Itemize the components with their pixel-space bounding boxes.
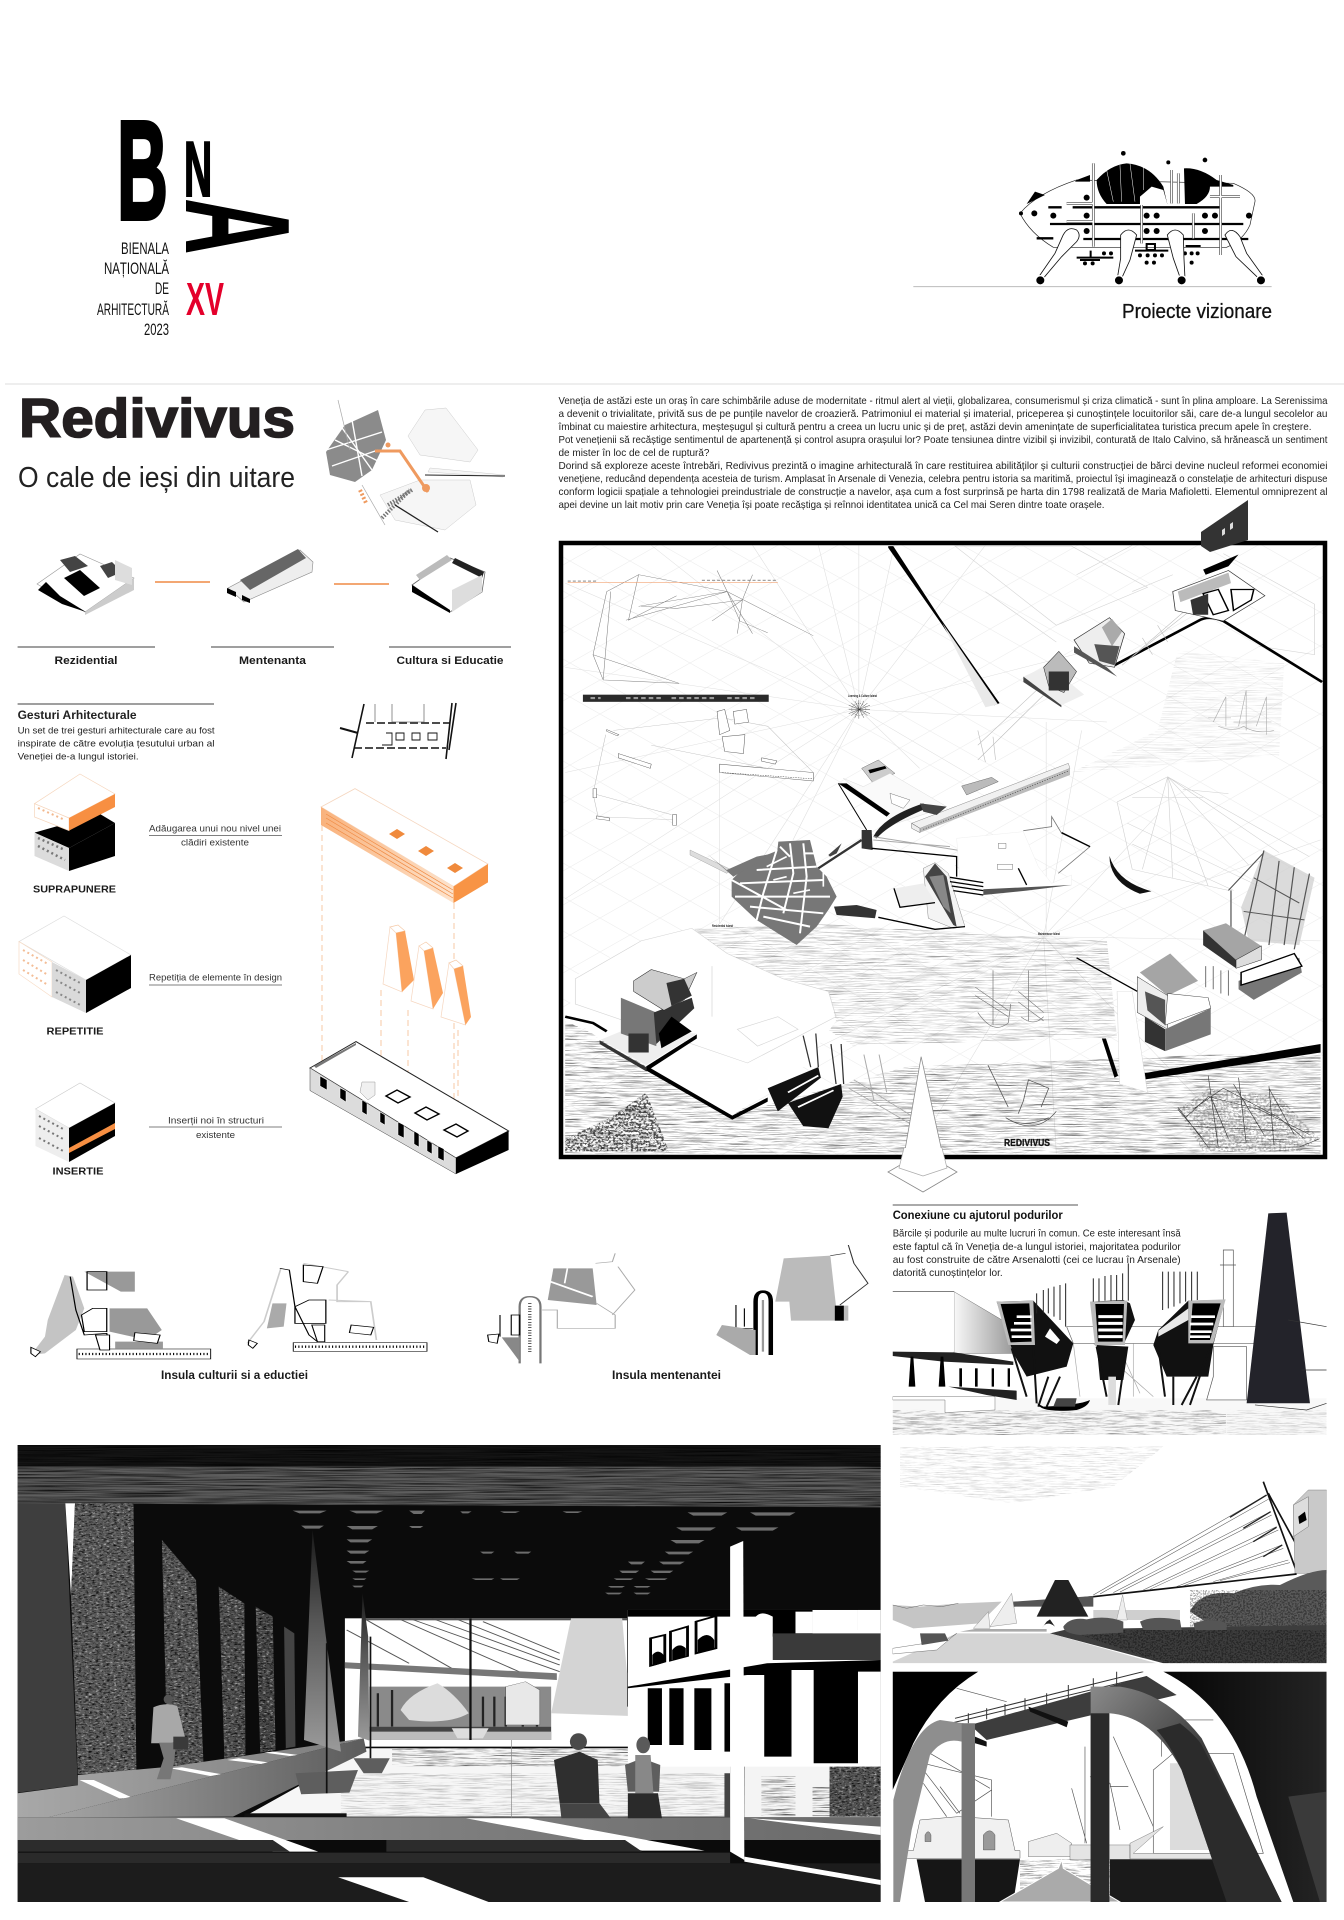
foreground sun bars <box>338 1857 881 1902</box>
black water edges <box>1077 958 1137 991</box>
lower-left plans diagram <box>593 709 813 825</box>
exploded axonometric <box>310 789 509 1174</box>
bridge head <box>920 803 947 815</box>
Neptune sketch <box>988 1065 1056 1126</box>
terrace black edge <box>838 783 890 817</box>
east island <box>957 832 1072 890</box>
white column ghost <box>1117 991 1147 1092</box>
walking man <box>151 1695 188 1779</box>
light islands <box>380 408 505 530</box>
isometric grid <box>563 545 1323 1155</box>
label: Insula culturii: Insula culturii si a eductiei <box>161 1370 308 1382</box>
map line <box>425 475 505 476</box>
far sails <box>1117 1595 1127 1620</box>
right section blocks <box>1203 923 1302 1000</box>
plan 4 <box>716 1245 868 1355</box>
pier trusses <box>978 608 1193 762</box>
light building ghosts <box>575 545 1315 1063</box>
black wharf <box>646 1067 768 1120</box>
shore outline <box>893 1603 958 1608</box>
glass mullion <box>510 1740 512 1850</box>
gate chain <box>834 905 877 918</box>
programme axonometries <box>37 549 485 615</box>
robot dots <box>1019 151 1252 265</box>
base building <box>310 1042 509 1174</box>
boat bow <box>1000 1860 1120 1902</box>
caption: suprapunere <box>149 824 282 848</box>
orange node <box>386 442 390 448</box>
intro text: a devenit o trivialitate, privită sus de pe punțile navelor de croazieră. Patrimoniul ei material și imaterial, priceperea și cunoștințele locuitorilor săi, care de-a lungul secolelor au <box>558 408 1328 420</box>
docked ship <box>1070 1827 1213 1860</box>
main axonometric drawing <box>561 500 1325 1192</box>
ceiling skylights <box>293 1511 795 1594</box>
mast <box>1263 1482 1308 1572</box>
east island outline <box>1023 817 1090 873</box>
canal foreground <box>18 1863 881 1902</box>
left hall wall <box>893 1292 1013 1365</box>
robot body <box>1020 180 1255 247</box>
sails <box>304 1530 631 1752</box>
plan 3 <box>488 1253 635 1363</box>
shore left <box>893 1602 1002 1628</box>
programme labels: Mentenanta <box>239 655 307 667</box>
black swoosh <box>1203 555 1239 575</box>
gesture: suprapunere icon <box>34 774 115 871</box>
ground line <box>913 285 1272 288</box>
black short edge <box>1102 1039 1118 1078</box>
bridges text block <box>893 1205 1181 1279</box>
drawing contents <box>565 545 1322 1153</box>
floor plan fragment <box>340 703 456 759</box>
intro text: de mister în loc de cel de ruptură? <box>558 447 710 459</box>
timber sail structure <box>1228 850 1315 949</box>
main interior render <box>18 1445 881 1902</box>
background chimney and city <box>1207 1250 1247 1400</box>
dome ribs <box>1107 163 1143 202</box>
site map <box>326 400 505 532</box>
connecting orange lines <box>155 582 389 584</box>
black quay line <box>1115 618 1322 682</box>
centre boathouse <box>1028 1833 1072 1857</box>
plinth <box>18 1840 642 1852</box>
hub tower <box>862 830 873 850</box>
caption: suprapunere: clădiri existente <box>181 838 249 848</box>
gesture: repetitie icon <box>19 916 131 1013</box>
eastward line <box>872 848 957 877</box>
base doors <box>925 1831 995 1850</box>
timeline strip <box>583 695 769 702</box>
orange connection <box>375 451 428 492</box>
ships lower right <box>1178 1076 1320 1147</box>
robot pipe highlights <box>1067 163 1240 255</box>
label: suprapunere: SUPRAPUNERE <box>33 884 116 896</box>
ship sketches upper <box>1208 690 1274 735</box>
right tower <box>1293 1490 1327 1573</box>
moored dark boat <box>948 1387 1017 1400</box>
south quay <box>878 917 965 929</box>
shadow on right tower <box>1170 1763 1253 1850</box>
dark pylon <box>1037 1580 1088 1617</box>
left cut building <box>600 970 697 1071</box>
lawn <box>1050 1625 1327 1663</box>
lagoon water <box>565 650 1321 1153</box>
chimneys <box>383 925 471 1025</box>
dock edge <box>894 888 935 907</box>
right wing <box>628 1610 881 1767</box>
gesture: insertie icon <box>36 1083 115 1162</box>
brick columns <box>18 1503 295 1793</box>
deck band <box>1067 1327 1268 1343</box>
walkway sun bars <box>80 1752 298 1798</box>
roof slab <box>321 789 488 903</box>
pod 3 <box>1153 1272 1226 1405</box>
obelisk base over frame <box>888 1148 957 1192</box>
courtyard <box>890 793 910 808</box>
timber beam <box>18 1467 881 1507</box>
drawing paper <box>563 545 1323 1155</box>
robot feet <box>1036 276 1266 285</box>
white column <box>730 1541 744 1860</box>
Gesturi Arhitecturale text block: Un set de trei gesturi arhitecturale care au fost <box>18 726 215 736</box>
dome details <box>1140 187 1167 204</box>
trees <box>1190 1570 1327 1627</box>
caption: insertie <box>149 1116 282 1141</box>
tiny island labels: Learning & Culture Island <box>848 694 877 698</box>
cable-stayed bridge render <box>893 1447 1327 1663</box>
floor sun bars <box>176 1818 881 1852</box>
Gesturi Arhitecturale text block: inspirate de către evoluția țesutului urban al <box>18 738 215 750</box>
terrace and buildings <box>843 773 947 823</box>
left piers <box>909 1357 1010 1387</box>
connecting black lines <box>818 840 862 868</box>
intro text: îmbinat cu maiestire arhitectura, meșteșugul și cultură pentru a creea un lucru unic și de preț, astăzi devin amenințate de superficialitatea turistica precum apele în creștere. <box>558 421 1312 433</box>
bridges text block: Bărcile și podurile au multe lucruri în comun. Ce este interesant însă <box>893 1228 1181 1240</box>
Gesturi Arhitecturale text block: Veneției de-a lungul istoriei. <box>18 752 139 762</box>
programme labels: Rezidential <box>54 655 118 667</box>
water reflections <box>917 1859 1260 1902</box>
robot pipes <box>1067 163 1240 255</box>
bridges text block: Conexiune cu ajutorul podurilor <box>893 1210 1063 1222</box>
arch pier <box>1091 1713 1109 1902</box>
ship sketches centre <box>975 970 1044 1027</box>
ships shading <box>1178 1088 1320 1151</box>
robot domes <box>1027 163 1233 204</box>
curved bridge <box>873 803 927 838</box>
right water <box>724 1763 881 1817</box>
Gesturi Arhitecturale text block <box>18 704 215 762</box>
stair edge <box>1018 868 1027 885</box>
east island edge <box>1062 833 1090 847</box>
caption: repetitie: Repetiția de elemente în design <box>149 972 282 984</box>
bridges text block: au fost construite de către Arsenalotti (cei ce lucrau în Arsenale) <box>893 1254 1181 1266</box>
programme labels <box>18 647 511 667</box>
long maintenance bar <box>912 763 1070 833</box>
black diagonal edge <box>888 546 1000 705</box>
pod 1 <box>997 1283 1073 1407</box>
caption: suprapunere: Adăugarea unui nou nivel unei <box>149 824 281 834</box>
map thin edges <box>338 400 385 525</box>
mast line <box>468 1618 472 1740</box>
category label: Proiecte vizionare: Proiecte vizionare <box>1122 301 1272 323</box>
arch dark body <box>1157 1723 1282 1902</box>
label: repetitie: REPETITIE <box>46 1026 104 1038</box>
waterfront <box>893 1397 995 1413</box>
label: Insula mentenantei: Insula mentenantei <box>612 1370 721 1382</box>
black strip lower right <box>1135 1044 1321 1081</box>
pod 2 <box>1090 1263 1135 1405</box>
east island pavilions <box>997 843 1013 869</box>
cable shadow accents <box>1230 1495 1282 1557</box>
logo wordmark: NAȚIONALĂ <box>104 259 169 278</box>
slipways <box>950 877 983 895</box>
sailboat <box>973 1593 1017 1628</box>
bushes <box>1063 1618 1227 1635</box>
label: insertie: INSERTIE <box>52 1166 104 1178</box>
central islands <box>690 760 1090 945</box>
bridges text block: datorită cunoștințelor lor. <box>893 1267 1003 1279</box>
axon: mentenanta <box>227 549 313 603</box>
upper right sections <box>1173 571 1265 621</box>
clouds <box>900 1447 1163 1503</box>
logo wordmark: ARHITECTURĂ <box>97 300 169 319</box>
underside parts <box>1077 244 1201 260</box>
subtitle: O cale de ieși din uitare <box>18 462 295 494</box>
crane and tower sketches <box>923 1688 1263 1853</box>
tiny island labels <box>712 694 1060 936</box>
robot vessel icon <box>913 151 1272 287</box>
dashed projection lines <box>322 825 458 1130</box>
title: Redivivus: Redivivus <box>19 387 295 449</box>
orange ticks <box>360 490 366 503</box>
right dark arch <box>1163 1672 1327 1902</box>
left arch inner face <box>962 1723 975 1902</box>
stone floor <box>18 1817 881 1840</box>
black crescent <box>1109 856 1151 894</box>
city streets <box>326 420 382 476</box>
distant view <box>345 1618 629 1747</box>
trees lower left <box>565 1092 669 1151</box>
robot legs <box>1039 229 1263 279</box>
intro text <box>558 395 1328 511</box>
logo wordmark: DE <box>155 279 169 298</box>
grey fan lines <box>873 837 967 852</box>
drawing title: REDIVIVUS <box>1004 1137 1050 1149</box>
moored boat <box>893 1633 957 1654</box>
perspective rays <box>565 545 1321 1153</box>
dark tower <box>1247 1213 1310 1403</box>
bridge pods <box>768 1033 915 1128</box>
right waterfront <box>1255 1320 1327 1410</box>
cables <box>1093 1495 1290 1595</box>
small block <box>862 760 895 783</box>
bridges text block: este faptul că în Veneția de-a lungul istoriei, majoritatea podurilor <box>893 1241 1181 1253</box>
covered dock <box>895 883 935 907</box>
left base <box>907 1817 1020 1858</box>
axon: cultura <box>412 555 485 613</box>
programme labels: Cultura si Educatie <box>396 655 504 667</box>
tiny island labels: Maintenance Island <box>1038 932 1060 936</box>
plinth edge <box>18 1853 730 1863</box>
robot stripes <box>1037 207 1248 239</box>
footbridge <box>953 1672 1177 1747</box>
axon: rezidential <box>37 554 134 615</box>
intro text: Dorind să exploreze aceste întrebări, Redivivus prezintă o imagine arhitecturală în care restituirea abilităților și culturii construcției de bărci devine nucleul reformei economiei <box>558 460 1328 472</box>
bridge pods elevation render <box>893 1213 1327 1435</box>
terrace strut <box>838 783 867 830</box>
tiny island labels: Residential Island <box>712 924 733 928</box>
obelisk <box>904 1057 942 1153</box>
caption: insertie: Inserții noi în structuri <box>168 1116 264 1126</box>
overhead dark arches <box>893 1672 978 1790</box>
paved path <box>893 1633 1157 1663</box>
plan 2 <box>247 1263 427 1351</box>
small section <box>828 843 842 857</box>
hanging boats <box>295 1637 489 1794</box>
far buildings <box>1093 1610 1180 1620</box>
logo letter B: B <box>117 91 168 249</box>
seated couple <box>554 1733 662 1818</box>
logo letter A rotated: A <box>153 198 320 255</box>
top fascia <box>18 1445 881 1467</box>
frame <box>561 543 1325 1157</box>
map diagonal <box>395 505 438 532</box>
water foreground <box>244 1748 730 1817</box>
logo wordmark: 2023 <box>144 320 169 339</box>
logo: BNA Bienala Nationala de Arhitectura <box>97 91 320 339</box>
cyclist <box>1042 1619 1055 1628</box>
city blocks <box>326 410 386 482</box>
gondola <box>1037 1398 1090 1411</box>
logo letter N: N <box>184 126 212 214</box>
water <box>893 1398 1327 1435</box>
plan 1 <box>31 1272 211 1359</box>
bridge arcs behind <box>1073 1343 1153 1397</box>
bridge deck <box>1013 1574 1297 1606</box>
east island base <box>983 885 1072 895</box>
intro text: apei devine un lait motiv prin care Veneția își poate recăștiga și reînnoi identitatea unică ca Cel mai Seren dintre toate orașele. <box>558 499 1104 511</box>
Gesturi Arhitecturale text block: Gesturi Arhitecturale <box>18 710 137 722</box>
caption: insertie: existente <box>196 1130 235 1141</box>
grey left arch <box>893 1720 975 1902</box>
residential island city blocks <box>690 840 837 945</box>
tower cap <box>1201 500 1248 552</box>
small shed <box>962 777 998 795</box>
black curved quay <box>565 1017 607 1031</box>
timber shed ghost <box>1117 777 1309 890</box>
logo red XV: XV <box>186 273 224 325</box>
intro text: conform logicii spațiale a tehnologiei preindustriale de construcție a navelor, așa cum a fost surprinsă pe harta din 1798 realizată de Maria Mafioletti. Elementul omniprezent al <box>558 486 1328 498</box>
vessel hull <box>923 863 965 928</box>
walkway <box>18 1738 364 1817</box>
white background <box>893 1672 1327 1902</box>
upper-left network diagram <box>568 571 813 683</box>
canal wall <box>48 1738 366 1817</box>
logo wordmark: BIENALA <box>121 239 169 258</box>
light sail wedge <box>942 623 998 707</box>
radial island star <box>849 700 870 719</box>
small block roof slot <box>868 766 887 773</box>
island plans <box>31 1245 868 1363</box>
dark base <box>18 1445 881 1902</box>
orange terminal <box>422 484 430 492</box>
left island white <box>570 928 836 1116</box>
hatched section <box>382 490 412 518</box>
quay <box>960 1629 1047 1632</box>
central dark arch <box>1091 1687 1282 1902</box>
logo wordmark <box>97 239 169 339</box>
separator <box>5 383 1344 385</box>
left approach truss <box>1013 1596 1093 1607</box>
arch bridge render <box>893 1672 1327 1902</box>
